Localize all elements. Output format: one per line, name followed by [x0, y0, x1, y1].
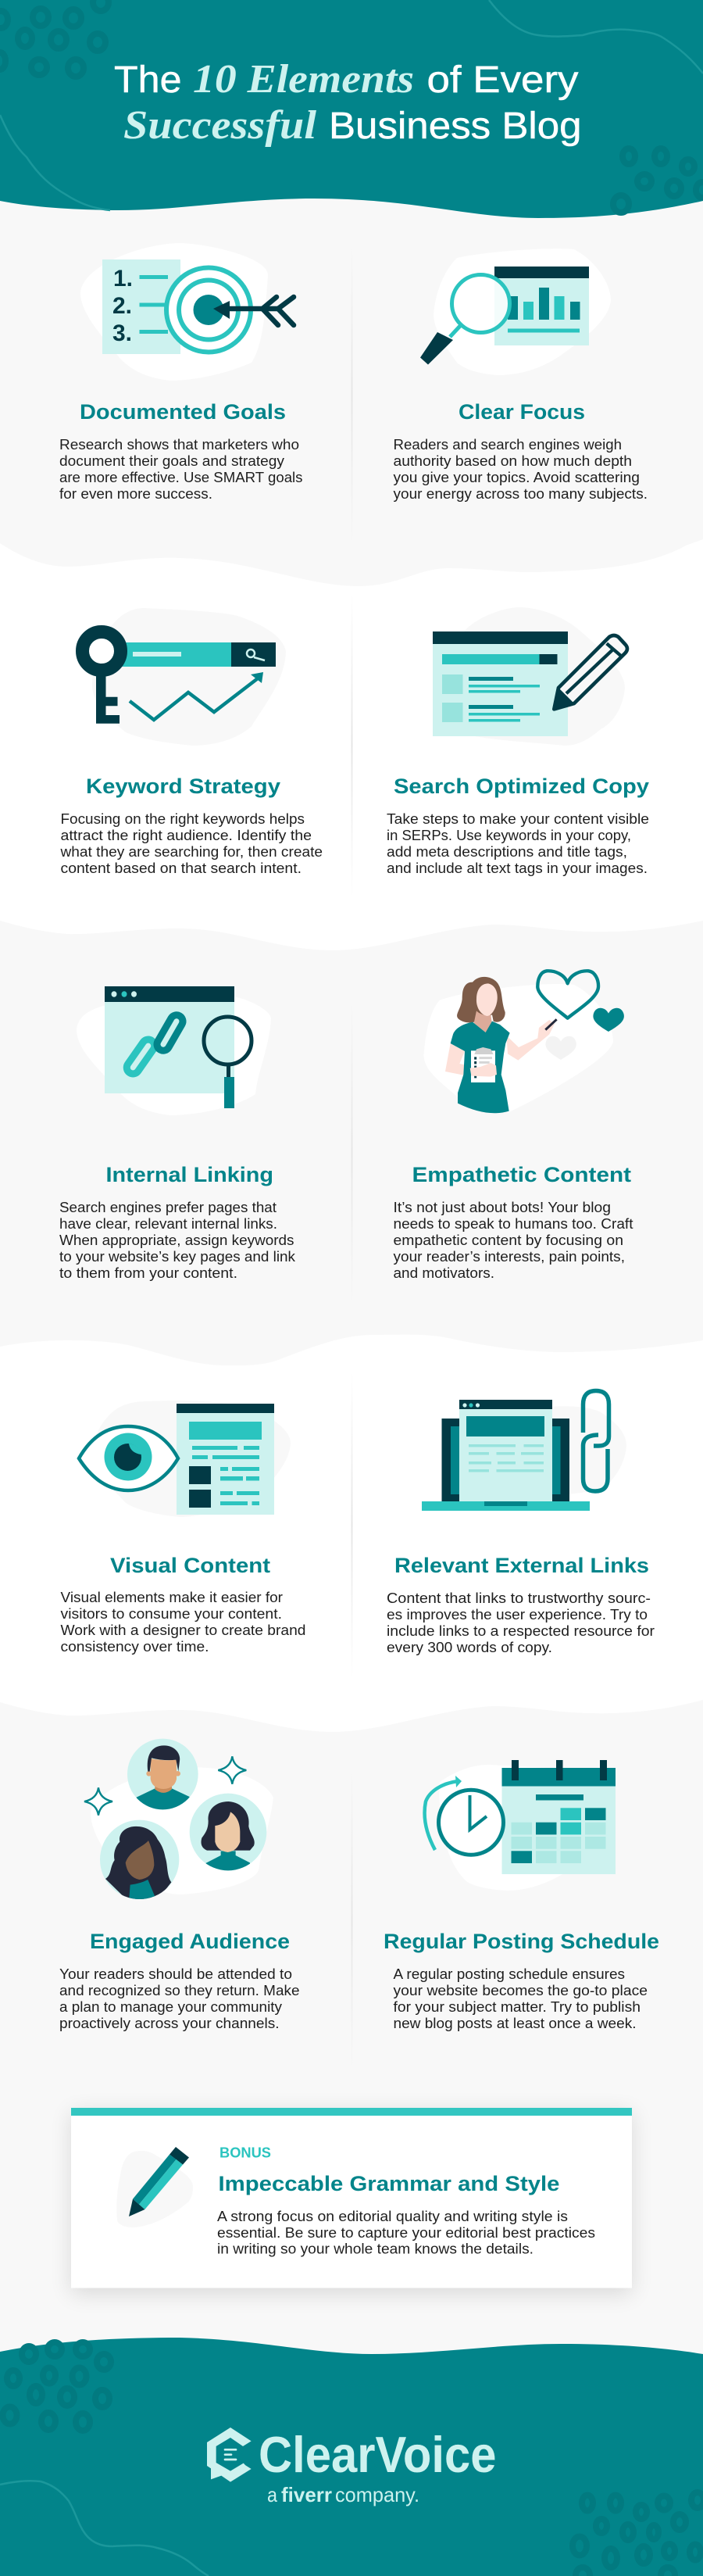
- icon: three avatars with sparkles: [84, 1739, 273, 1902]
- panel: keyword strategy: [59, 608, 323, 876]
- title: 10 Elements: [193, 57, 414, 102]
- panel: internal linking: [59, 986, 296, 1281]
- body text: [217, 2209, 595, 2257]
- bonus label: BONUS: [219, 2145, 271, 2160]
- heading: Search Optimized Copy: [394, 775, 649, 798]
- body text: what they are searching for, then create: [59, 844, 323, 860]
- body text: [59, 811, 323, 876]
- body text: Research shows that marketers who: [59, 437, 299, 453]
- icon: clock and calendar: [425, 1760, 616, 1891]
- tagline: [267, 2483, 419, 2506]
- body text: attract the right audience. Identify the: [61, 828, 312, 843]
- title: [114, 57, 581, 148]
- body text: empathetic content by focusing on: [394, 1233, 623, 1248]
- body text: new blog posts at least once a week.: [394, 2016, 636, 2031]
- icon: browser window with chain link and magnifier: [77, 986, 271, 1115]
- body text: you give your topics. Avoid scattering: [394, 470, 640, 485]
- body text: [394, 1966, 648, 2031]
- body text: your website becomes the go-to place: [394, 1983, 648, 1998]
- body text: essential. Be sure to capture your editorial best practices: [217, 2225, 595, 2241]
- heading: Relevant External Links: [394, 1554, 649, 1577]
- header banner: [0, 0, 703, 218]
- tagline: company.: [335, 2483, 419, 2506]
- body text: [61, 1590, 306, 1655]
- body text: for even more success.: [59, 486, 212, 502]
- title: Successful: [123, 103, 317, 148]
- body text: to them from your content.: [59, 1265, 237, 1281]
- body text: Readers and search engines weigh: [394, 437, 622, 453]
- heading: Visual Content: [110, 1554, 270, 1577]
- heading: Impeccable Grammar and Style: [219, 2172, 559, 2195]
- heading: Keyword Strategy: [86, 775, 280, 798]
- icon: eye with page layout: [79, 1401, 291, 1517]
- body text: Search engines prefer pages that: [59, 1200, 277, 1215]
- title: The: [114, 59, 181, 101]
- panel: clear focus: [394, 249, 648, 502]
- body text: every 300 words of copy.: [387, 1640, 552, 1655]
- body text: a plan to manage your community: [59, 1999, 282, 2015]
- body text: and motivators.: [394, 1265, 494, 1281]
- wordmark: ClearVoice: [259, 2426, 497, 2483]
- body text: [394, 437, 648, 502]
- icon: numbered list and target with arrow: 3.: [112, 320, 132, 346]
- body text: include links to a respected resource for: [387, 1623, 655, 1639]
- tagline: fiverr: [281, 2483, 332, 2506]
- logo: ClearVoice: [207, 2426, 497, 2506]
- panel: search optimized copy: [387, 607, 649, 876]
- icon: laptop with page and chain: [422, 1391, 626, 1511]
- body text: for your subject matter. Try to publish: [394, 1999, 641, 2015]
- body text: authority based on how much depth: [394, 453, 632, 469]
- icon: numbered list and target with arrow: [80, 243, 294, 381]
- body text: Content that links to trustworthy sourc-: [387, 1590, 651, 1606]
- body text: es improves the user experience. Try to: [387, 1607, 648, 1623]
- body text: consistency over time.: [61, 1639, 209, 1655]
- body text: needs to speak to humans too. Craft: [394, 1216, 633, 1232]
- body text: your energy across too many subjects.: [394, 486, 648, 502]
- body text: [59, 1966, 300, 2031]
- body text: Work with a designer to create brand: [61, 1623, 306, 1638]
- panel: empathetic content: [394, 971, 633, 1281]
- body text: Your readers should be attended to: [59, 1966, 292, 1982]
- title: of Every: [426, 59, 578, 101]
- heading: Internal Linking: [106, 1163, 273, 1186]
- body text: A strong focus on editorial quality and writing style is: [217, 2209, 568, 2224]
- icon: key with search bar and trend arrow: [83, 608, 286, 746]
- body text: and include alt text tags in your images.: [387, 860, 648, 876]
- body text: proactively across your channels.: [59, 2016, 280, 2031]
- body text: to your website’s key pages and link: [59, 1249, 296, 1265]
- body text: visitors to consume your content.: [61, 1606, 282, 1622]
- title: Business Blog: [329, 106, 581, 147]
- heading: Documented Goals: [80, 400, 286, 424]
- panel: relevant external links: [387, 1391, 655, 1655]
- icon: numbered list and target with arrow: 1.: [113, 266, 133, 292]
- icon: search results page with pencil: [433, 607, 627, 746]
- body text: and recognized so they return. Make: [59, 1983, 300, 1998]
- body text: Focusing on the right keywords helps: [61, 811, 305, 827]
- body text: add meta descriptions and title tags,: [387, 844, 627, 860]
- body text: A regular posting schedule ensures: [394, 1966, 625, 1982]
- body text: [394, 1200, 633, 1281]
- body text: have clear, relevant internal links.: [59, 1216, 277, 1232]
- logo mark: [207, 2428, 252, 2482]
- panel: documented goals: [59, 243, 303, 502]
- body text: your reader’s interests, pain points,: [394, 1249, 625, 1265]
- heading: Regular Posting Schedule: [384, 1930, 659, 1953]
- icon: pencil: [116, 2147, 193, 2227]
- body text: It’s not just about bots! Your blog: [394, 1200, 611, 1215]
- body text: When appropriate, assign keywords: [59, 1233, 294, 1248]
- panel: regular posting schedule: [384, 1760, 659, 2031]
- body text: in SERPs. Use keywords in your copy,: [387, 828, 631, 843]
- icon: magnifier over chart: [420, 249, 611, 375]
- heading: Empathetic Content: [412, 1163, 631, 1186]
- body text: [59, 437, 303, 502]
- icon: woman with clipboard and hearts: [423, 971, 624, 1113]
- panel: engaged audience: [59, 1739, 300, 2031]
- panel: bonus card: [71, 2108, 632, 2294]
- body text: content based on that search intent.: [61, 860, 302, 876]
- body text: document their goals and strategy: [59, 453, 284, 469]
- body text: [387, 811, 649, 876]
- icon: numbered list and target with arrow: 2.: [112, 293, 132, 319]
- body text: [387, 1590, 655, 1655]
- body text: Visual elements make it easier for: [61, 1590, 283, 1605]
- heading: Clear Focus: [459, 400, 585, 424]
- section dividers: [352, 244, 353, 2073]
- panel: visual content: [61, 1401, 306, 1655]
- body text: Take steps to make your content visible: [387, 811, 649, 827]
- body text: in writing so your whole team knows the details.: [217, 2241, 533, 2257]
- body text: [59, 1200, 296, 1281]
- tagline: a: [267, 2483, 277, 2506]
- footer banner: [0, 2338, 703, 2576]
- heading: Engaged Audience: [90, 1930, 290, 1953]
- body text: are more effective. Use SMART goals: [59, 470, 303, 485]
